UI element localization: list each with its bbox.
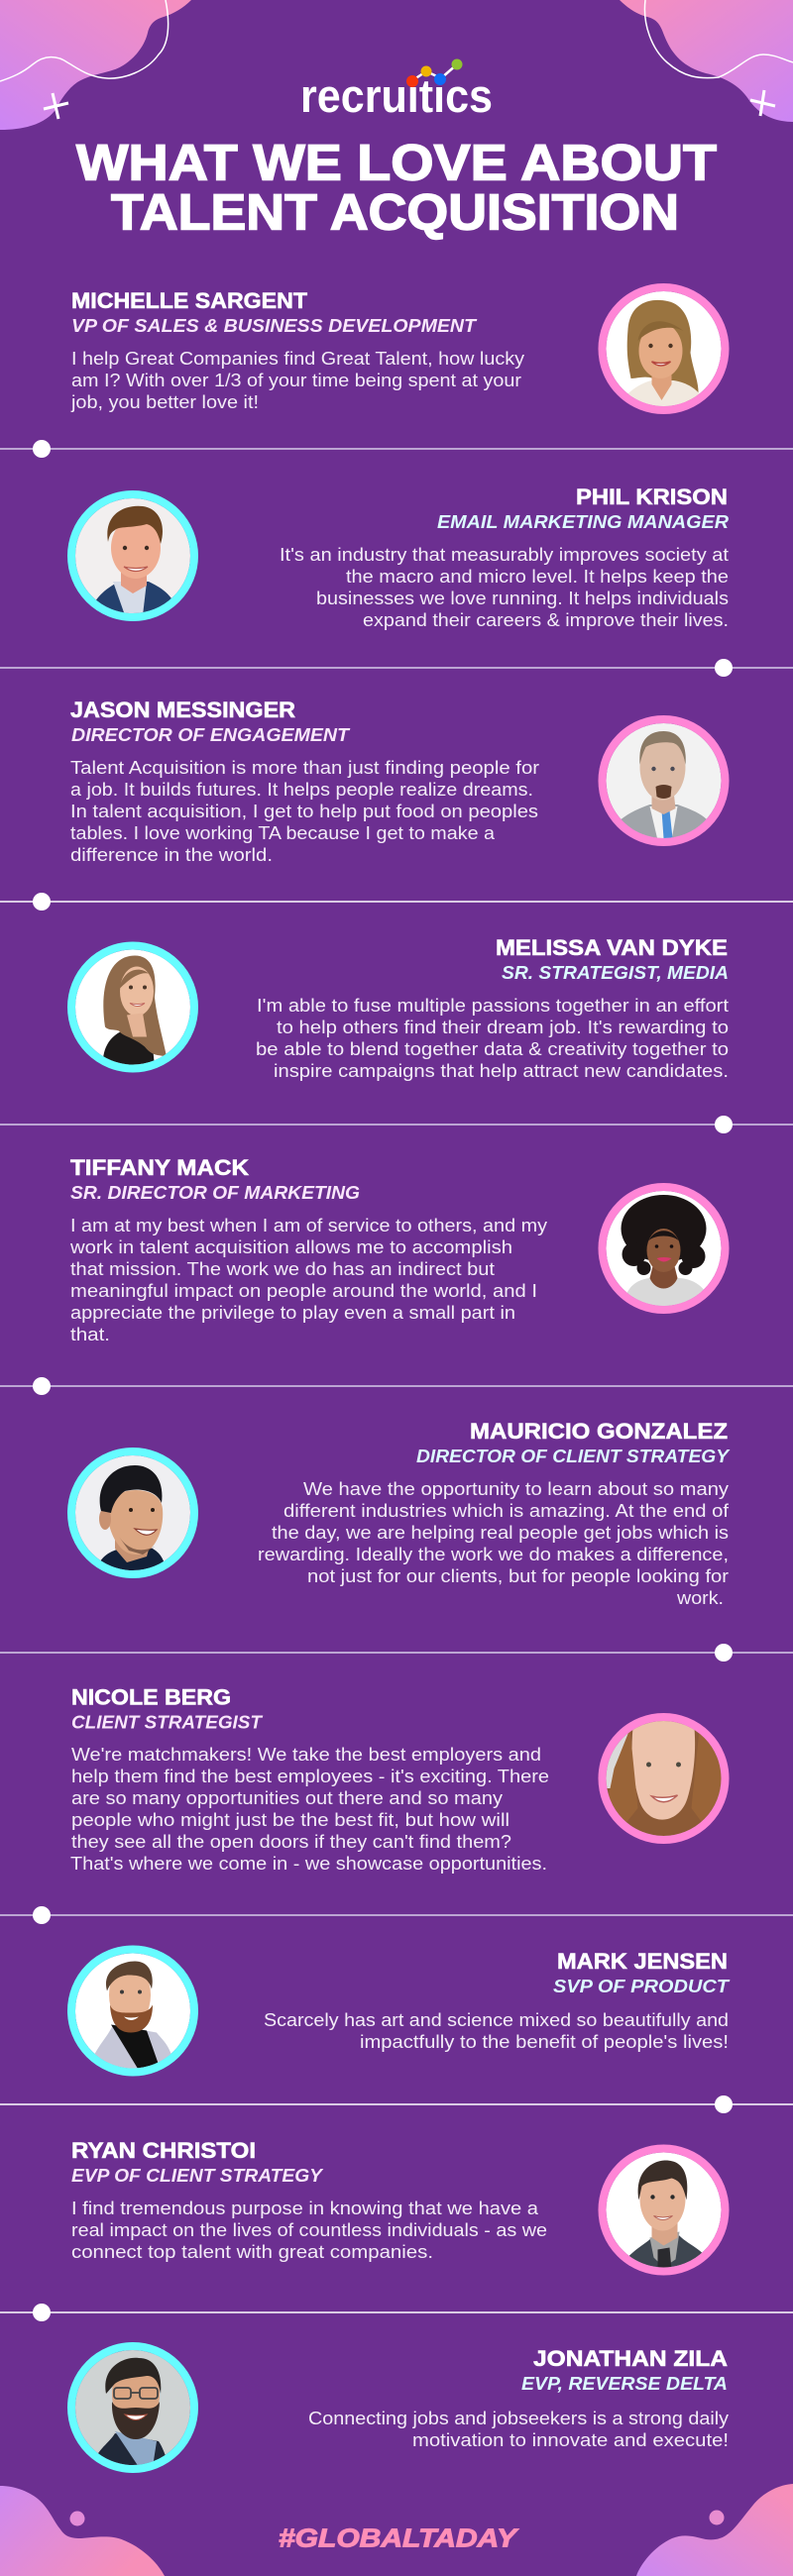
panel: Melissa Van Dyke	[71, 935, 729, 1081]
panel: Ryan Christoi	[71, 2138, 726, 2271]
quote	[70, 758, 539, 865]
role: EVP, REVERSE DELTA	[521, 2373, 728, 2394]
quote: It's an industry that measurably improves society at	[280, 545, 729, 565]
quote: We have the opportunity to learn about so many	[303, 1479, 729, 1499]
name: MARK JENSEN	[557, 1949, 728, 1974]
role: SR. STRATEGIST, MEDIA	[502, 962, 729, 983]
quote: help them find the best employees - it's exciting. There	[71, 1767, 549, 1786]
quote	[71, 2199, 547, 2262]
quote	[280, 545, 729, 630]
panel: Jason Messinger	[70, 698, 726, 865]
quote	[70, 1745, 549, 1874]
title: TALENT ACQUISITION	[111, 184, 679, 240]
photo: Nicole Berg	[603, 1717, 726, 1840]
photo: Tiffany Mack	[603, 1187, 726, 1310]
quote: real impact on the lives of countless individuals - as we	[71, 2220, 547, 2240]
hashtag: #GLOBALTADAY	[279, 2522, 519, 2552]
name: MAURICIO GONZALEZ	[470, 1419, 728, 1444]
panel: Jonathan Zila	[71, 2346, 729, 2469]
quote: tables. I love working TA because I get to make a	[70, 823, 496, 843]
photo: Jason Messinger	[603, 719, 726, 842]
quote: people who might just be the best fit, but how will	[71, 1810, 510, 1830]
quote: In talent acquisition, I get to help put food on peoples	[70, 802, 538, 821]
name: RYAN CHRISTOI	[71, 2138, 256, 2163]
photo: Melissa Van Dyke	[71, 945, 194, 1068]
quote: I help Great Companies find Great Talent, how lucky	[71, 349, 524, 369]
quote: a job. It builds futures. It helps people realize dreams.	[70, 780, 533, 800]
quote: We're matchmakers! We take the best employers and	[71, 1745, 541, 1765]
decoration: top right blob	[620, 0, 793, 122]
quote: inspire campaigns that help attract new candidates.	[274, 1061, 729, 1081]
quote: job, you better love it!	[70, 392, 259, 412]
quote: Connecting jobs and jobseekers is a strong daily	[308, 2409, 729, 2428]
quote: work in talent acquisition allows me to accomplish	[69, 1237, 512, 1257]
name: PHIL KRISON	[576, 484, 728, 509]
decoration: bottom left blob	[0, 2486, 165, 2576]
role: CLIENT STRATEGIST	[71, 1712, 264, 1732]
title	[76, 135, 717, 240]
quote: businesses we love running. It helps individuals	[316, 589, 729, 608]
name: JONATHAN ZILA	[533, 2346, 728, 2371]
quote: impactfully to the benefit of people's lives!	[360, 2032, 729, 2052]
quote: Scarcely has art and science mixed so beautifully and	[264, 2010, 729, 2030]
quote: difference in the world.	[70, 845, 273, 865]
title: WHAT WE LOVE ABOUT	[76, 135, 717, 190]
quote: expand their careers & improve their lives.	[363, 610, 729, 630]
quote: the macro and micro level. It helps keep the	[346, 567, 729, 587]
quote: am I? With over 1/3 of your time being spent at your	[71, 371, 521, 390]
name: NICOLE BERG	[71, 1684, 231, 1710]
quote: I am at my best when I am of service to others, and my	[70, 1216, 547, 1235]
quote: that.	[70, 1325, 110, 1344]
quote: work.	[676, 1588, 724, 1608]
panel: Phil Krison	[71, 484, 730, 630]
quote: I'm able to fuse multiple passions together in an effort	[257, 996, 729, 1016]
quote: are so many opportunities out there and so many	[71, 1788, 503, 1808]
panel: Michelle Sargent	[70, 287, 726, 412]
role: DIRECTOR OF CLIENT STRATEGY	[416, 1446, 731, 1466]
quote: be able to blend together data & creativity together to	[256, 1039, 729, 1059]
quote	[308, 2409, 729, 2450]
quote: not just for our clients, but for people looking for	[307, 1566, 729, 1586]
photo: Michelle Sargent	[603, 287, 726, 410]
quote	[264, 2010, 729, 2052]
decoration: bottom right blob	[636, 2484, 793, 2576]
quote	[258, 1479, 730, 1608]
photo: Phil Krison	[71, 494, 194, 617]
quote: I find tremendous purpose in knowing that we have a	[71, 2199, 539, 2218]
quote: rewarding. Ideally the work we do makes a difference,	[258, 1545, 729, 1564]
quote: That's where we come in - we showcase opportunities.	[70, 1854, 547, 1874]
quote: the day, we are helping real people get jobs which is	[272, 1523, 729, 1543]
photo: Jonathan Zila	[71, 2346, 194, 2469]
quote: motivation to innovate and execute!	[412, 2430, 729, 2450]
quote	[69, 1216, 547, 1344]
panel: Nicole Berg	[70, 1684, 726, 1874]
quote: connect top talent with great companies.	[71, 2242, 433, 2262]
photo: Ryan Christoi	[603, 2148, 726, 2271]
quote	[256, 996, 729, 1081]
photo: Mark Jensen	[71, 1950, 194, 2073]
role: SR. DIRECTOR OF MARKETING	[70, 1182, 360, 1203]
quote: to help others find their dream job. It's rewarding to	[277, 1018, 729, 1037]
role: EMAIL MARKETING MANAGER	[437, 511, 730, 532]
quote: that mission. The work we do has an indirect but	[70, 1259, 495, 1279]
name: JASON MESSINGER	[70, 698, 295, 722]
name: MELISSA VAN DYKE	[496, 935, 728, 960]
quote: they see all the open doors if they can't find them?	[71, 1832, 511, 1852]
photo: Mauricio Gonzalez	[71, 1451, 194, 1574]
quote	[70, 349, 524, 412]
panel: Mark Jensen	[71, 1949, 731, 2073]
quote: different industries which is amazing. At the end of	[283, 1501, 730, 1521]
role: VP OF SALES & BUSINESS DEVELOPMENT	[71, 315, 478, 336]
quote: appreciate the privilege to play even a small part in	[70, 1303, 515, 1323]
name: MICHELLE SARGENT	[71, 288, 307, 313]
role: EVP OF CLIENT STRATEGY	[71, 2165, 324, 2186]
quote: Talent Acquisition is more than just finding people for	[70, 758, 539, 778]
decoration: top left blob	[0, 0, 191, 130]
name: TIFFANY MACK	[70, 1155, 250, 1180]
quote: meaningful impact on people around the world, and I	[70, 1281, 537, 1301]
panel: Tiffany Mack	[69, 1155, 726, 1344]
panel: Mauricio Gonzalez	[71, 1419, 731, 1608]
role: SVP OF PRODUCT	[553, 1976, 731, 1996]
role: DIRECTOR OF ENGAGEMENT	[71, 724, 351, 745]
logo: recruitics: recruitics	[300, 69, 493, 122]
